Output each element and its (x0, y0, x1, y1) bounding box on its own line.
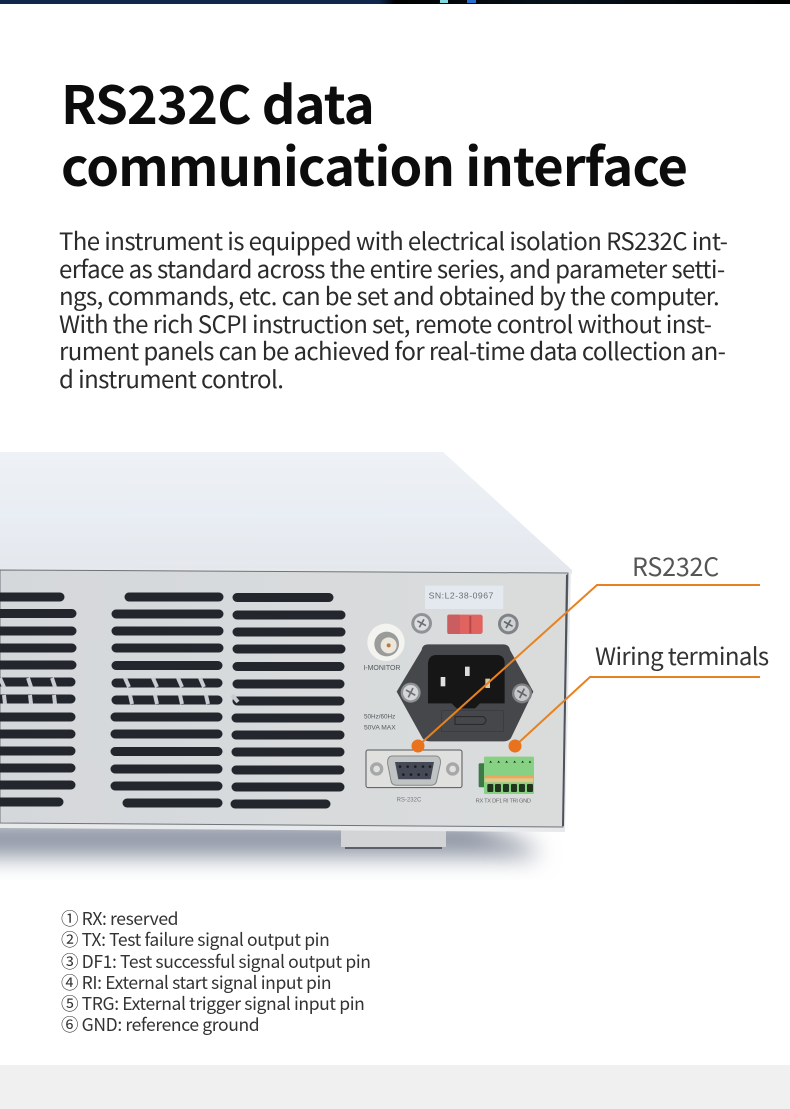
screws and power switch (411, 613, 519, 634)
pin list: ⑤ TRG: External trigger signal input pin (61, 991, 364, 1016)
orange leader: wiring terminals (508, 677, 760, 752)
green wiring terminal block: RX TX DF1 RI TRI GND (476, 798, 531, 804)
BNC connector I-monitor: I-MONITOR (363, 665, 400, 672)
pin list: ① RX: reserved (61, 906, 178, 931)
description text (59, 222, 727, 395)
pin list: ② TX: Test failure signal output pin (61, 927, 329, 952)
description text: The instrument is equipped with electrical isolation RS232C int- (59, 222, 727, 257)
device front lip (0, 567, 571, 832)
light stripes behind slots (0, 678, 238, 704)
product photo illustration (0, 452, 760, 873)
device top surface (0, 452, 572, 574)
serial label: SN:L2-38-0967 (429, 591, 494, 601)
orange leader: RS232C (412, 585, 760, 752)
label: RS232C: RS232C (632, 548, 719, 584)
rear panel components (363, 586, 534, 804)
BNC connector I-monitor (363, 624, 405, 672)
title (61, 64, 687, 202)
pin list: ③ DF1: Test successful signal output pin (61, 949, 371, 974)
AC power inlet (397, 644, 533, 741)
description text: rument panels can be achieved for real-time data collection an- (59, 332, 725, 367)
top dark strip (0, 0, 790, 4)
serial label (425, 586, 503, 609)
device shadow (0, 822, 540, 856)
RS-232C DB9 connector (366, 750, 462, 804)
title: communication interface (61, 126, 687, 202)
voltage rating text: 50Hz/60Hz (364, 713, 395, 720)
title: RS232C data (61, 64, 374, 140)
pin list: ⑥ GND: reference ground (61, 1012, 259, 1037)
device foot (341, 830, 446, 849)
pin list: ④ RI: External start signal input pin (61, 970, 331, 995)
pin list (61, 906, 371, 1037)
ventilation slots (0, 597, 341, 804)
label: wiring terminals: Wiring terminals (595, 637, 769, 672)
description text: erface as standard across the entire series, and parameter setti- (59, 250, 725, 285)
device rear panel (0, 570, 568, 827)
description text: With the rich SCPI instruction set, remote control without inst- (59, 305, 711, 340)
green wiring terminal block (476, 757, 534, 804)
panel right dark edge (562, 574, 568, 826)
RS-232C DB9 connector: RS-232C (397, 798, 422, 804)
bottom grey band (0, 1065, 790, 1109)
voltage rating text: 50VA MAX (364, 725, 396, 732)
voltage rating text (364, 713, 396, 732)
description text: d instrument control. (59, 360, 283, 395)
description text: ngs, commands, etc. can be set and obtained by the computer. (59, 277, 719, 312)
